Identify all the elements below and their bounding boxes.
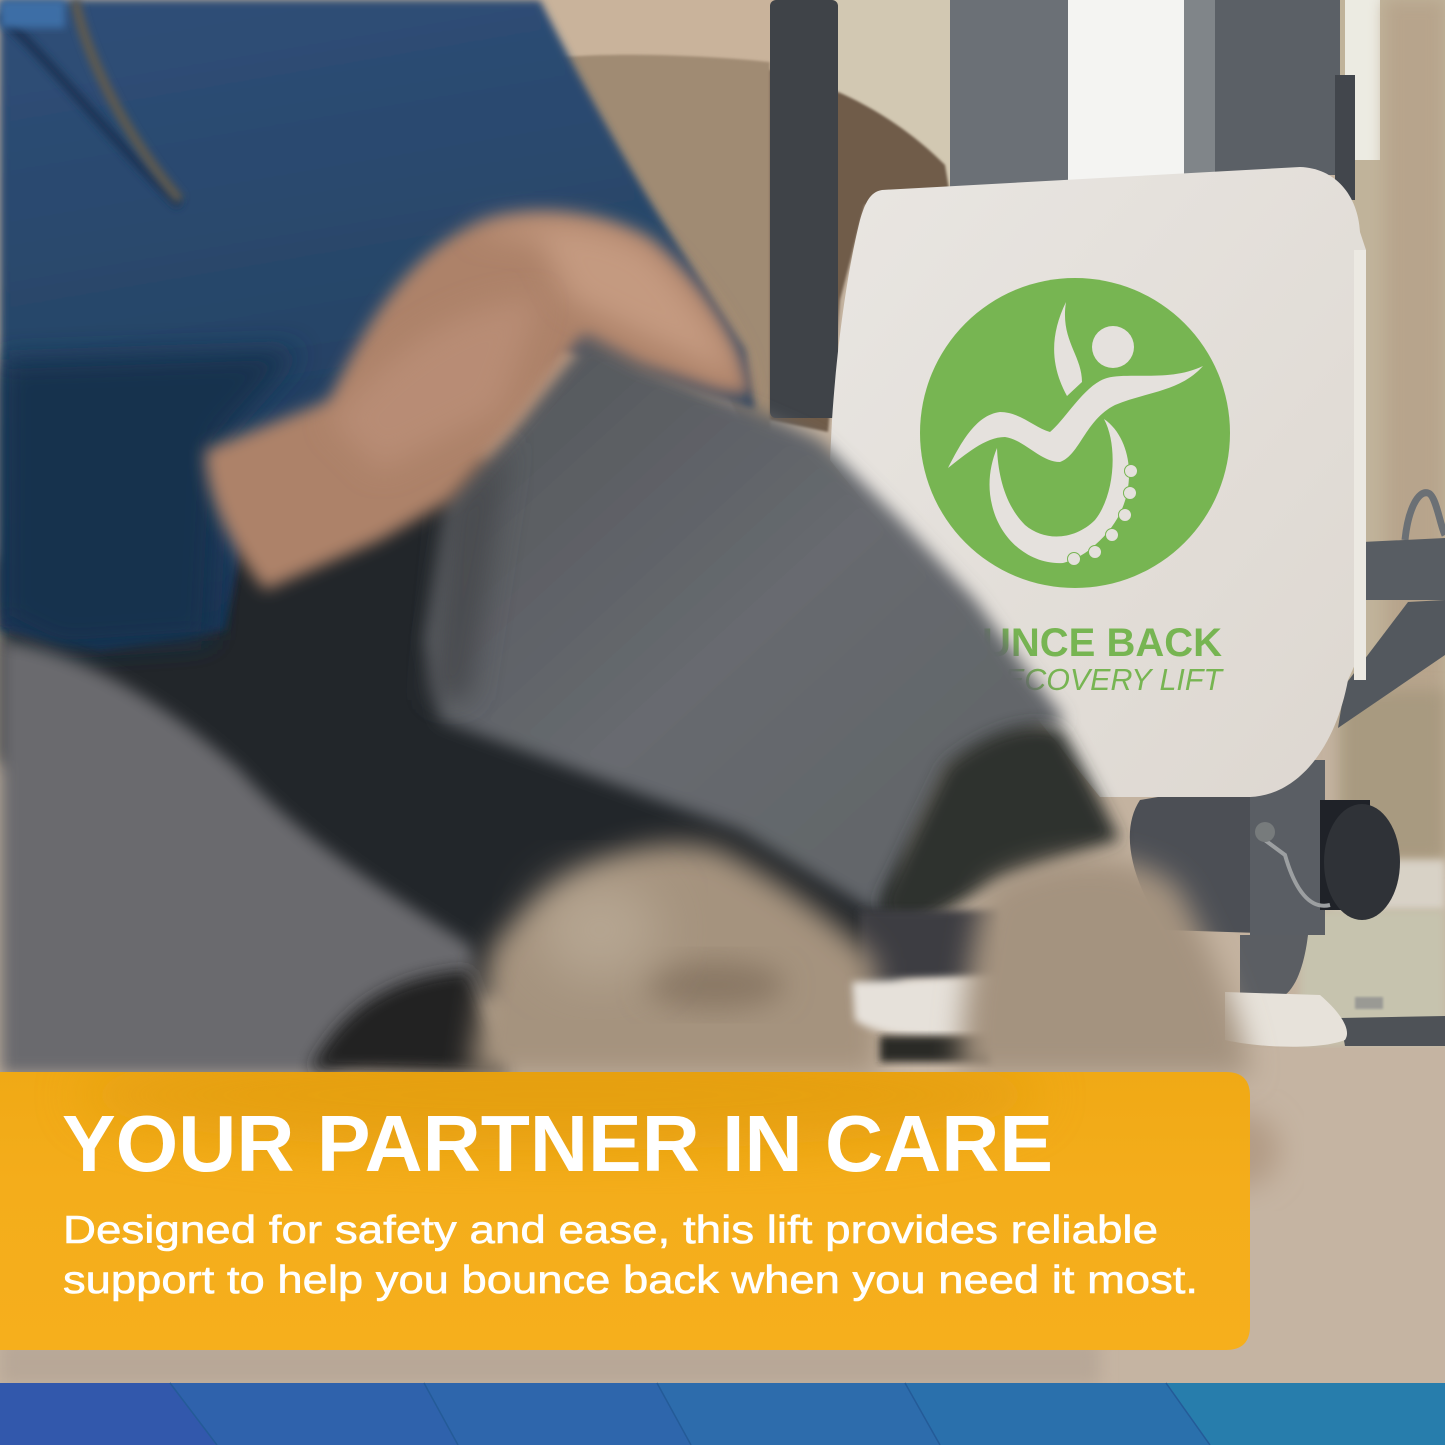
sweater xyxy=(0,0,755,650)
banner darker tint xyxy=(132,1072,988,1142)
lift panel with logo xyxy=(830,167,1366,797)
seated man, blurred foreground xyxy=(0,0,1280,1188)
armchair xyxy=(550,55,950,432)
lift mast and frame xyxy=(770,0,1355,418)
body text: support to help you bounce back when you need it most. xyxy=(63,1259,1198,1302)
blurred toe on carpet xyxy=(1200,1112,1280,1188)
sock right xyxy=(880,725,1120,940)
logo wordmark: RECOVERY LIFT xyxy=(982,662,1224,697)
body text: Designed for safety and ease, this lift provides reliable xyxy=(63,1209,1158,1252)
logo wordmark: BOUNCE BACK xyxy=(922,621,1222,665)
banner background xyxy=(0,1072,1250,1350)
dark gap under the foot xyxy=(860,910,1000,980)
logo circle xyxy=(920,278,1230,588)
title: YOUR PARTNER IN CARE xyxy=(62,1099,1053,1188)
panel xyxy=(830,167,1366,797)
collar and zipper xyxy=(0,15,180,205)
dark base under the torso and trousers xyxy=(0,440,900,1000)
hand xyxy=(205,212,752,590)
body text xyxy=(63,1209,1198,1302)
logo figure xyxy=(948,302,1203,563)
white foot plate xyxy=(852,975,1000,1037)
right foot xyxy=(960,858,1250,1075)
sock left xyxy=(310,970,510,1075)
lower left leg xyxy=(0,640,480,1075)
sleeve shadow xyxy=(0,350,300,650)
lift arm and base on the right xyxy=(1130,493,1445,1047)
left foot xyxy=(470,844,880,1075)
yellow caption banner xyxy=(0,1072,1250,1350)
main leg xyxy=(425,332,1065,915)
logo wordmark xyxy=(922,621,1224,697)
blue footer strip xyxy=(0,1383,1445,1445)
logo beads xyxy=(1068,464,1138,566)
